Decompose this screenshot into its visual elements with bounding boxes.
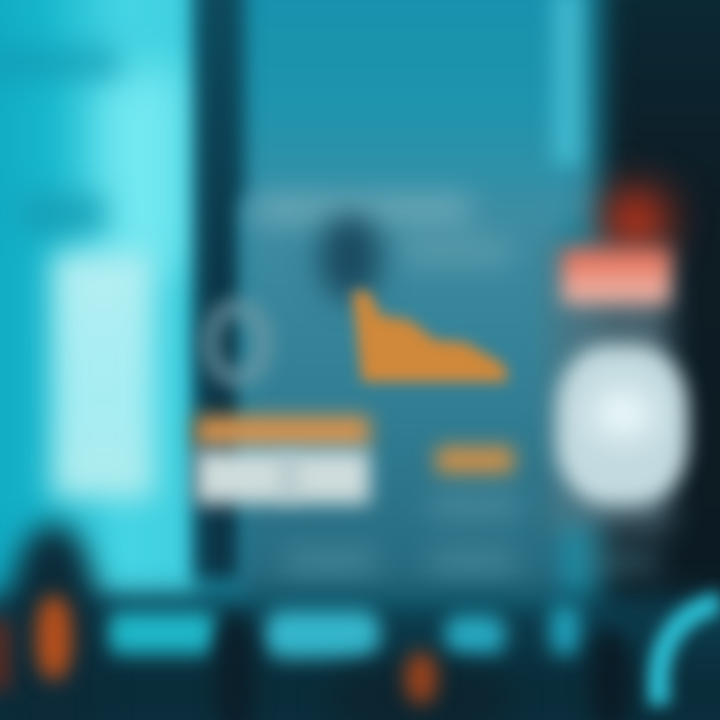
red glow: far left edge <box>0 620 10 690</box>
card: white body <box>195 450 370 504</box>
text bars: bottom center <box>430 550 515 574</box>
text bars: lower center <box>430 495 520 517</box>
silhouette: bottom right person <box>590 630 630 720</box>
right card: salmon header <box>562 250 670 304</box>
orange small label <box>436 446 514 474</box>
bottom cyan pill right <box>550 605 580 655</box>
left column dark top band <box>0 48 120 78</box>
text bars: bottom center-left <box>285 550 375 574</box>
heading: center title bar <box>255 195 470 223</box>
panel: right dark area <box>600 0 720 720</box>
bottom cyan pill left <box>105 612 217 654</box>
card divider marks <box>284 454 294 500</box>
bottom cyan pill center-left <box>265 610 380 658</box>
icon: dark figure <box>320 215 380 300</box>
right light strip <box>552 0 586 165</box>
bottom cyan pill center <box>445 615 505 655</box>
panel: bottom dark strip <box>0 596 720 720</box>
left column bright glow <box>100 70 185 270</box>
left heading shape <box>20 195 105 233</box>
silhouette: bottom center person <box>215 615 255 720</box>
bottom right cyan arc <box>636 582 720 716</box>
panel: left cyan column <box>0 0 195 600</box>
text bars: bottom right <box>578 550 658 574</box>
panel: right card backdrop <box>552 240 670 530</box>
orange glow: left person <box>36 595 72 680</box>
orange glow: bottom center <box>405 652 437 704</box>
panel: center top teal <box>240 0 600 220</box>
panel: center lower body <box>242 200 562 600</box>
panel: dark vertical band <box>196 0 244 580</box>
right card: gauge inner <box>592 388 654 440</box>
icon: ring <box>203 300 271 386</box>
panel: left pale card <box>52 252 154 498</box>
silhouette: bottom left person <box>8 525 98 720</box>
subtitle bar <box>400 240 510 262</box>
red glow <box>605 190 667 250</box>
silhouette: bottom audience <box>330 665 510 720</box>
card: orange header bar <box>195 416 370 446</box>
right card: gauge panel <box>556 345 688 505</box>
chart: orange area chart <box>343 280 516 392</box>
